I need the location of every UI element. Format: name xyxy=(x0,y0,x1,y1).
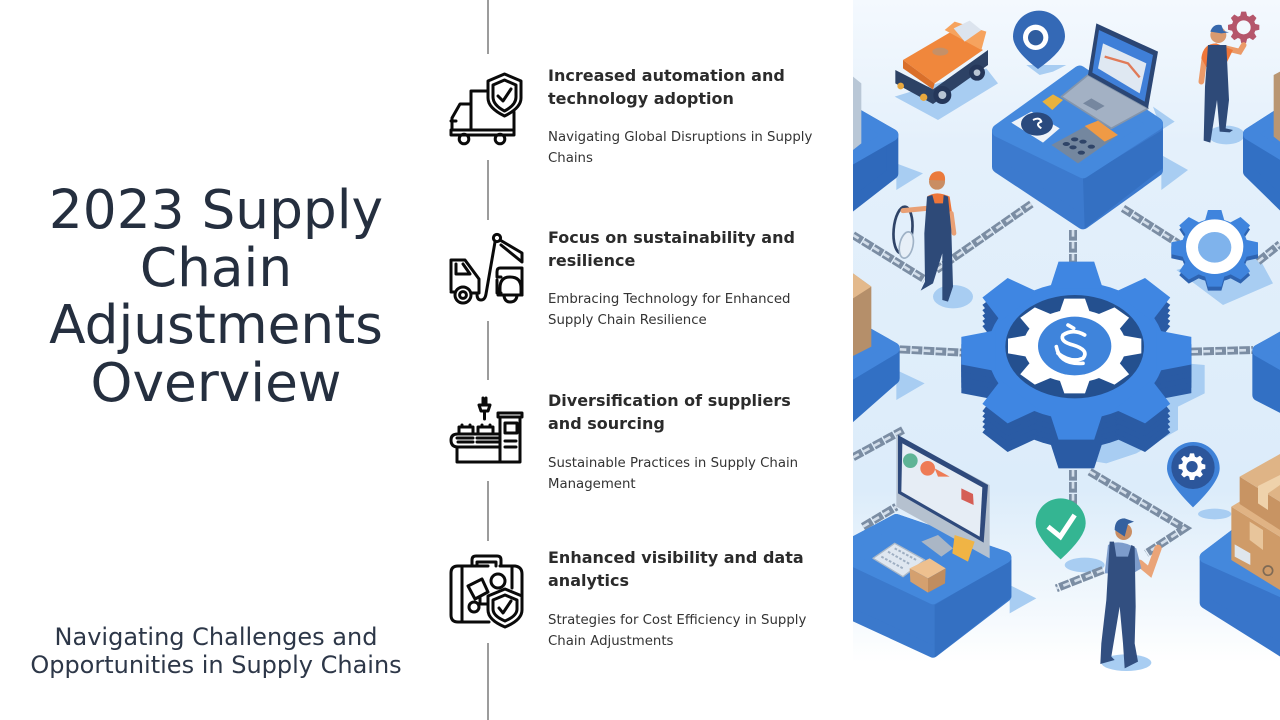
icon: suitcase with shield xyxy=(450,554,524,628)
worker: bottom holding chain xyxy=(1100,518,1158,668)
heading: diversification: and sourcing xyxy=(548,414,665,433)
description: cost efficiency: Chain Adjustments xyxy=(548,634,673,649)
small box xyxy=(910,558,946,578)
chains xyxy=(853,204,1280,588)
heading: visibility: analytics xyxy=(548,571,629,590)
sticky note xyxy=(1042,94,1063,110)
description: cost efficiency xyxy=(548,613,806,649)
subtitle: Navigating Challenges and xyxy=(55,623,377,651)
keyboard xyxy=(873,543,925,577)
title: 2023 Supply xyxy=(49,179,383,241)
platform: bottom right with boxes xyxy=(1206,454,1280,653)
worker: left with rope xyxy=(892,171,955,302)
main gear with dollar xyxy=(961,262,1191,468)
pin: check xyxy=(1036,498,1086,559)
heading: automation: Increased automation and xyxy=(548,66,785,85)
heading: diversification: Diversification of suppliers xyxy=(548,391,791,410)
description: technology xyxy=(548,292,790,328)
small gear xyxy=(1171,210,1258,291)
description: global disruptions: Navigating Global Disruptions in Supply xyxy=(548,130,812,145)
description: technology: Supply Chain Resilience xyxy=(548,313,707,328)
title: Chain xyxy=(140,237,292,299)
platform: middle right xyxy=(1258,335,1280,409)
description: cost efficiency: Strategies for Cost Efficiency in Supply xyxy=(548,613,806,628)
heading: sustainability: resilience xyxy=(548,251,635,270)
pin: location top xyxy=(1013,11,1065,69)
receipt with badge xyxy=(1011,112,1060,143)
platform: middle left with box xyxy=(846,273,894,420)
monitor xyxy=(921,535,953,557)
heading: automation xyxy=(548,66,785,108)
platform: bottom left with monitor xyxy=(846,435,1011,657)
platform: top centre with laptop xyxy=(999,23,1163,229)
description: sustainable practices: Sustainable Practices in Supply Chain xyxy=(548,456,798,471)
subtitle: Opportunities in Supply Chains xyxy=(30,651,402,679)
worker: top right with gear xyxy=(1201,12,1259,143)
heading: diversification xyxy=(548,391,791,433)
laptop xyxy=(1061,75,1148,128)
calculator xyxy=(1051,125,1116,163)
title: Overview xyxy=(91,352,341,414)
bottom group xyxy=(846,435,1280,668)
description: sustainable practices: Management xyxy=(548,477,636,492)
title: Adjustments xyxy=(49,294,383,356)
platform: top right xyxy=(1249,72,1280,208)
description: sustainable practices xyxy=(548,456,798,492)
illustration: supply chain network xyxy=(853,0,1280,671)
title xyxy=(49,179,383,414)
ground shadows xyxy=(895,65,1273,671)
description: global disruptions xyxy=(548,130,812,166)
subtitle xyxy=(30,623,402,679)
description: technology: Embracing Technology for Enhanced xyxy=(548,292,790,307)
platform: top left xyxy=(843,77,892,212)
pin: gear xyxy=(1167,442,1220,507)
icon: tow truck xyxy=(450,232,524,304)
heading: sustainability xyxy=(548,228,795,270)
icon: dollar xyxy=(1056,325,1085,363)
icon: truck with shield xyxy=(450,72,522,146)
heading: sustainability: Focus on sustainability and xyxy=(548,228,795,247)
icon: factory machine xyxy=(450,396,524,464)
description: global disruptions: Chains xyxy=(548,151,593,166)
heading: visibility xyxy=(548,548,804,590)
heading: automation: technology adoption xyxy=(548,89,734,108)
heading: visibility: Enhanced visibility and data xyxy=(548,548,804,567)
truck xyxy=(895,21,988,104)
